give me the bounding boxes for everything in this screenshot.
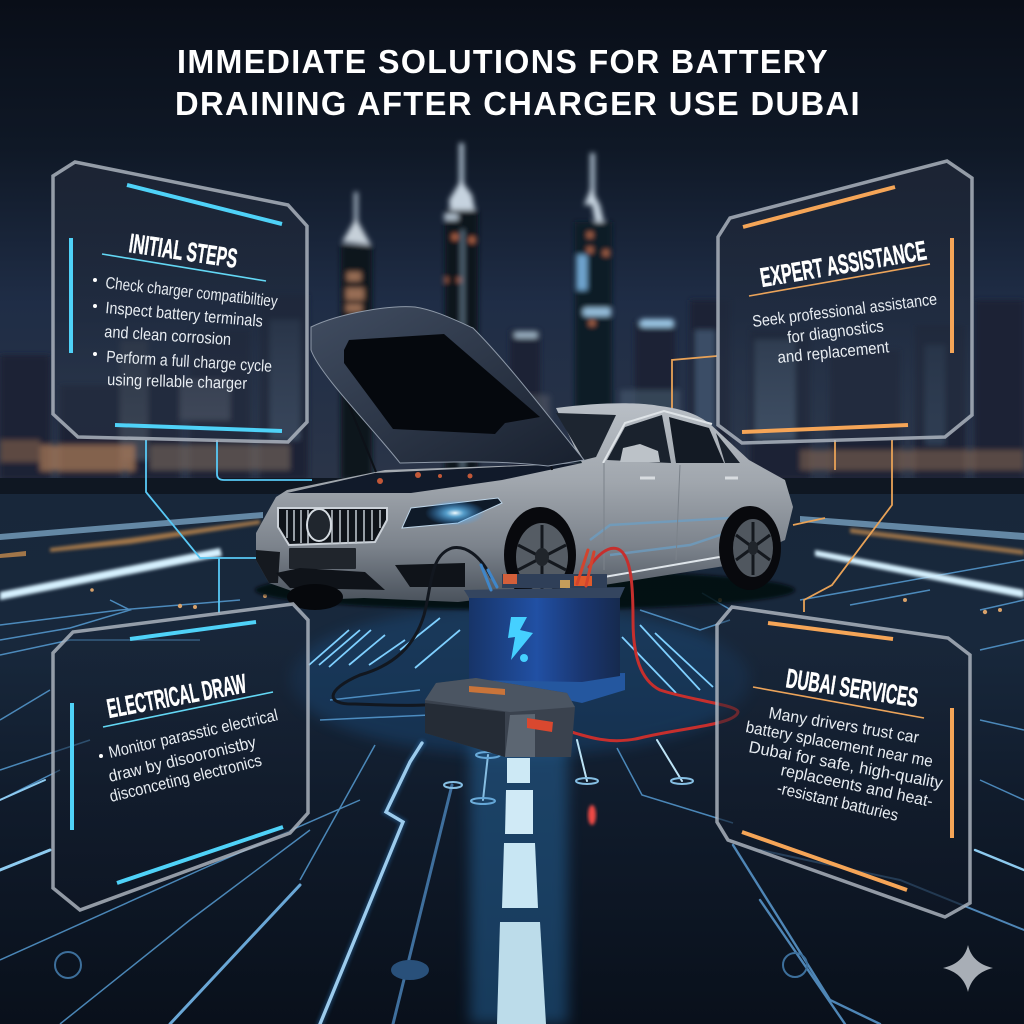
grille xyxy=(278,508,387,545)
title xyxy=(175,43,861,122)
center road dashes xyxy=(470,740,568,1024)
car side windows xyxy=(603,411,740,463)
panel: dubai services xyxy=(717,607,970,917)
accents xyxy=(72,622,283,883)
open hood xyxy=(311,307,584,466)
car xyxy=(255,307,795,610)
charger unit xyxy=(425,678,575,757)
icon: lightning bolt xyxy=(508,617,533,662)
panel: initial steps xyxy=(53,162,307,442)
list: initial steps: and clean corrosion xyxy=(104,323,232,349)
title: DRAINING AFTER CHARGER USE DUBAI xyxy=(175,85,861,122)
text: expert assistance: and replacement xyxy=(777,338,890,367)
text: dubai services xyxy=(744,704,945,825)
panel: electrical draw xyxy=(53,604,308,910)
list: initial steps: using rellable charger xyxy=(107,371,248,393)
glowing road streaks xyxy=(0,512,1024,600)
text: dubai services: -resistant batturies xyxy=(775,779,900,825)
accents xyxy=(742,623,952,890)
text: electrical draw: Monitor parasstic electrical xyxy=(107,706,280,762)
main glowing traces xyxy=(0,740,1024,1024)
plate and lower intakes xyxy=(289,548,356,569)
accents xyxy=(71,185,282,431)
text: dubai services: Many drivers trust car xyxy=(767,704,921,747)
connector lines from panels xyxy=(146,356,892,613)
battery case xyxy=(469,596,620,682)
body details xyxy=(590,463,738,577)
badge xyxy=(307,509,331,541)
text: electrical draw: draw by disooronistby xyxy=(107,733,259,786)
reflection: red glint xyxy=(588,805,596,825)
front tyre xyxy=(287,584,343,610)
hood strut xyxy=(347,400,552,472)
list: initial steps: Perform a full charge cycle xyxy=(106,348,273,376)
heading: dubai services: DUBAI SERVICES xyxy=(784,663,920,713)
city lights xyxy=(0,319,1024,471)
text: electrical draw: disconceting electronics xyxy=(108,752,264,806)
headlight xyxy=(402,498,502,528)
orange floor sparks xyxy=(90,588,1002,614)
tower 2 xyxy=(444,143,478,480)
side mirror xyxy=(620,444,660,462)
list: initial steps: Inspect battery terminals xyxy=(105,299,264,331)
battery base xyxy=(469,673,625,703)
engine bay xyxy=(287,463,582,493)
background: night sky xyxy=(0,0,1024,490)
ground: circuit board floor xyxy=(0,478,1024,1024)
jumper cables xyxy=(333,547,738,741)
text: dubai services: battery splacement near me xyxy=(744,718,934,771)
text: expert assistance xyxy=(751,290,938,367)
windshield xyxy=(556,413,616,460)
accents xyxy=(742,187,952,432)
car shadow xyxy=(255,570,795,610)
bright traces near the battery xyxy=(309,618,713,693)
battery xyxy=(464,574,625,703)
heading: electrical draw: ELECTRICAL DRAW xyxy=(105,668,249,724)
list: initial steps: Check charger compatibiltiey xyxy=(105,274,279,311)
skyline: blurred Dubai towers xyxy=(0,143,1024,480)
text: expert assistance: Seek professional assistance xyxy=(751,290,938,331)
title: IMMEDIATE SOLUTIONS FOR BATTERY xyxy=(177,43,829,80)
text: dubai services: replaceents and heat- xyxy=(779,761,935,811)
list: initial steps xyxy=(93,274,279,393)
rear wheel xyxy=(719,506,781,590)
panel: expert assistance xyxy=(718,161,972,443)
hood underside panel xyxy=(344,334,540,434)
tower 3 xyxy=(575,153,612,480)
heading: initial steps: INITIAL STEPS xyxy=(127,228,239,274)
circuit traces on floor xyxy=(0,560,1024,1024)
tower 1 xyxy=(341,192,372,480)
front wheel xyxy=(504,507,576,603)
battery top xyxy=(464,587,625,598)
car body xyxy=(256,403,793,602)
text: electrical draw xyxy=(99,706,280,806)
text: dubai services: Dubai for safe, high-quality xyxy=(747,738,945,793)
battery terminals xyxy=(503,574,592,588)
text: expert assistance: for diagnostics xyxy=(786,317,885,347)
icon: sparkle watermark xyxy=(943,945,993,992)
